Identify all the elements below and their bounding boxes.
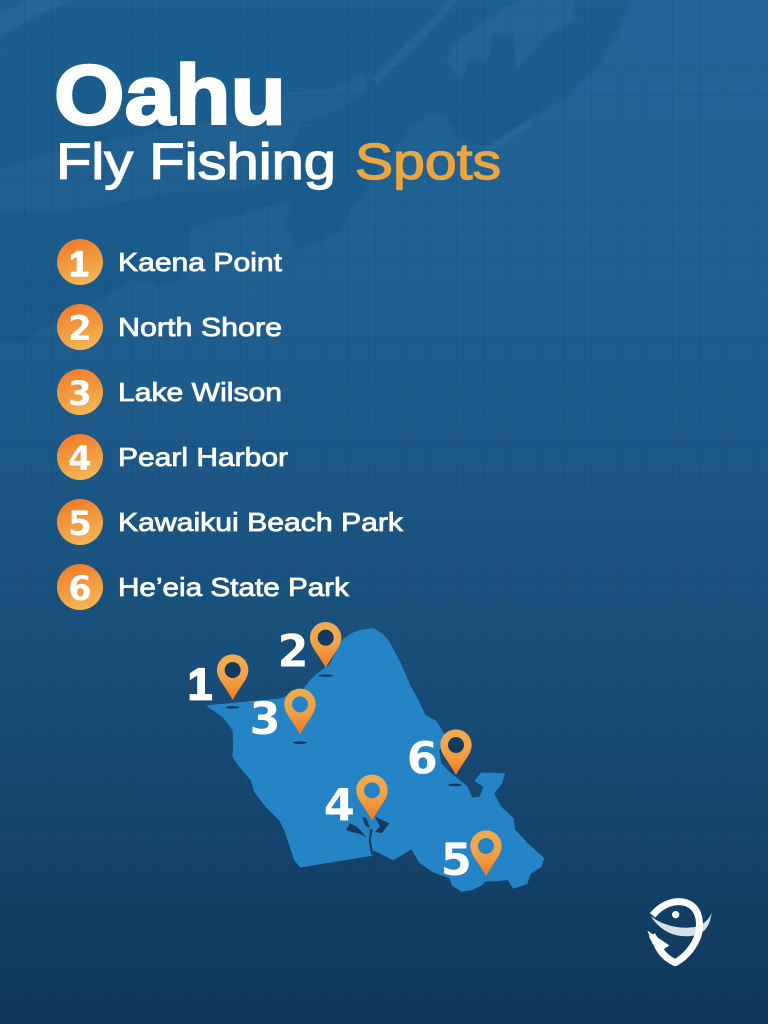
- subtitle: Fly Fishing Spots: [56, 133, 501, 190]
- pin 1: 1: [188, 660, 212, 709]
- pin 2: 2: [277, 626, 309, 678]
- pin 5: 5: [441, 834, 472, 886]
- pin 1: [188, 654, 248, 709]
- map of Oahu with pins: [188, 622, 543, 891]
- numbered list of fishing spots: [57, 239, 404, 610]
- subtitle: Fly Fishing Spots: Spots: [355, 133, 501, 190]
- list item 1: Kaena Point: [118, 247, 283, 277]
- list item 3: Lake Wilson: [118, 377, 282, 407]
- pin 3: 3: [249, 693, 281, 745]
- island of Oahu: [208, 629, 543, 891]
- pin 3: [249, 689, 316, 745]
- list item 6: [57, 564, 350, 610]
- list item 1: 1: [69, 245, 89, 284]
- list item 5: [57, 499, 404, 545]
- list item 4: [57, 434, 288, 480]
- list item 6: He’eia State Park: [118, 572, 350, 602]
- list item 5: Kawaikui Beach Park: [118, 507, 404, 537]
- pin 5: [441, 830, 502, 886]
- list item 2: 2: [68, 309, 92, 349]
- icon: fish logo: [647, 902, 712, 963]
- list item 4: Pearl Harbor: [118, 442, 288, 472]
- list item 6: 6: [68, 569, 92, 609]
- pin 4: [324, 775, 388, 832]
- pin 2: [277, 622, 341, 678]
- list item 1: [57, 239, 283, 285]
- pin 4: 4: [324, 780, 355, 832]
- pin 6: 6: [407, 732, 438, 784]
- pin shadows: [226, 674, 498, 884]
- list item 5: 5: [68, 504, 92, 544]
- background: faded nautical map: [0, 0, 633, 345]
- title: Oahu: Oahu: [54, 48, 286, 142]
- title: [54, 48, 501, 190]
- list item 4: 4: [68, 439, 92, 479]
- list item 2: North Shore: [118, 312, 282, 342]
- pin 6: [407, 729, 472, 784]
- Pearl Harbor inlet: [346, 817, 389, 855]
- list item 3: 3: [68, 374, 92, 414]
- list item 3: [57, 369, 282, 415]
- list item 2: [57, 304, 282, 350]
- subtitle: Fly Fishing Spots: Fly Fishing: [56, 133, 336, 190]
